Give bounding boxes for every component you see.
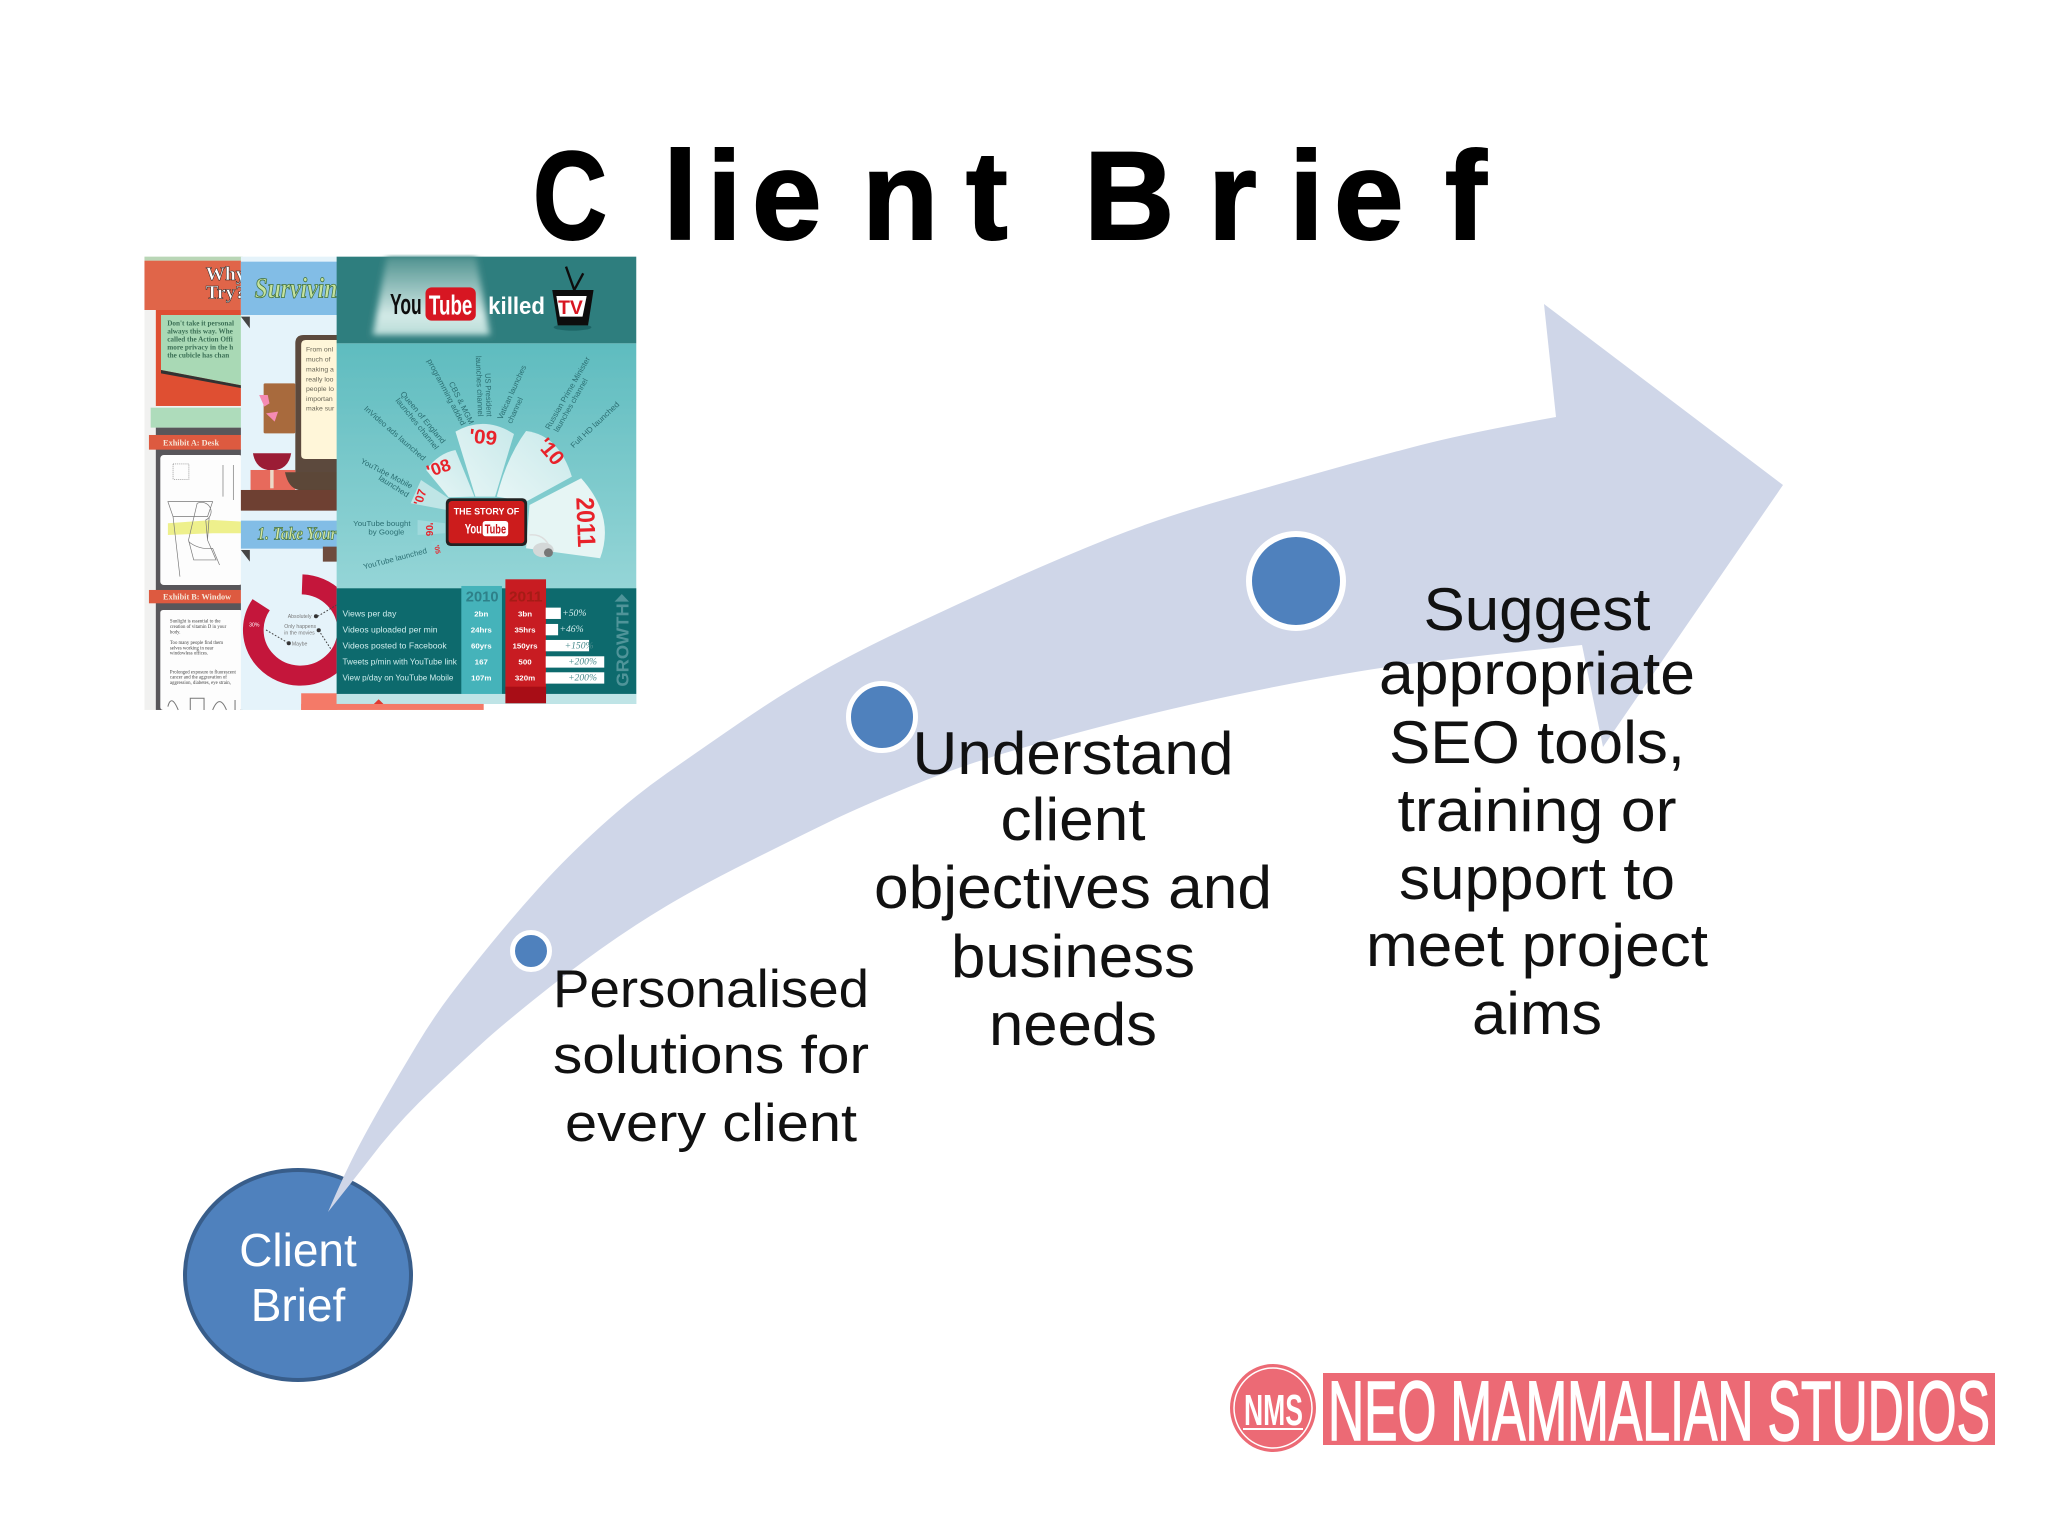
table: youtube growth: Videos uploaded per min (342, 625, 438, 635)
panel: why try infographic: Prolonged exposure to fluorescent (170, 670, 237, 675)
client brief circle: Brief (251, 1279, 346, 1331)
step 3 text (1366, 576, 1708, 1047)
table: youtube growth: View p/day on YouTube Mobile (342, 673, 454, 683)
table: youtube growth: +150% (565, 642, 594, 652)
chart: timeline fan: '09 (468, 426, 498, 450)
chart: timeline fan: Full HD launched (569, 400, 621, 450)
chart: timeline fan: '07 (411, 487, 430, 507)
chart: donut: in the movies (284, 631, 315, 637)
panel: why try infographic: aggression, diabetes, eye strain, (170, 681, 231, 686)
table: youtube growth: 107m (471, 674, 491, 683)
step 2 text: Understand (912, 720, 1234, 787)
badge: the story of youtube: Tube (485, 522, 506, 536)
chart: timeline fan: YouTube bought (353, 519, 411, 528)
logo: neo mammalian studios (1230, 1364, 1995, 1458)
chart: donut: Absolutely (288, 614, 312, 620)
icon: laptop: much of (306, 357, 331, 364)
chart: timeline fan: '06 (423, 523, 434, 536)
panel: why try infographic: more privacy in the h (167, 344, 233, 352)
chart: timeline fan: '10 (532, 434, 569, 470)
table: youtube growth: Views per day (342, 609, 397, 619)
icon: laptop: making a (306, 366, 334, 373)
table: youtube growth: 35hrs (514, 626, 536, 635)
badge: the story of youtube (446, 498, 554, 557)
title: C (533, 127, 607, 266)
step 3 text: aims (1472, 980, 1602, 1047)
panel: why try infographic: Exhibit A: Desk (163, 438, 220, 447)
icon: tv: TV (558, 297, 583, 319)
step 2 marker (848, 684, 916, 750)
table: youtube growth: Videos posted to Facebook (342, 641, 447, 651)
chart: timeline fan: InVideo ads launched (362, 404, 428, 463)
title: t (966, 127, 1008, 266)
table: youtube growth: 167 (475, 658, 488, 667)
client brief circle (185, 1170, 411, 1380)
panel: surviving infographic (241, 257, 349, 710)
panel: why try infographic: Don't take it personal (167, 320, 234, 328)
growth arrow (328, 304, 1783, 1212)
title: B (1084, 127, 1174, 266)
step 2 text: client (1000, 786, 1146, 853)
table: youtube growth: 2bn (474, 610, 489, 619)
table: youtube growth: +46% (559, 625, 584, 635)
step 3 text: support to (1399, 845, 1675, 912)
title: r (1208, 127, 1257, 266)
icon: laptop: make sur (306, 406, 335, 413)
step 2 text: objectives and (874, 854, 1272, 921)
table: youtube growth: 3bn (518, 610, 532, 619)
icon: laptop: From onl (306, 347, 334, 354)
step 1 marker (512, 932, 550, 970)
step 2 text: needs (989, 991, 1157, 1058)
panel: youtube killed tv infographic: You (390, 289, 422, 321)
chart: donut: Maybe (292, 641, 308, 647)
title: l (663, 127, 698, 266)
chart: timeline fan: programming added (425, 358, 468, 427)
table: youtube growth: 150yrs (512, 642, 538, 651)
panel: why try infographic: creation of vitamin D in your (170, 625, 227, 630)
step 3 text: meet project (1366, 912, 1708, 979)
badge: the story of youtube: THE STORY OF (454, 507, 520, 517)
step 3 text: SEO tools, (1389, 709, 1685, 776)
step 3 marker (1249, 534, 1343, 628)
panel: surviving infographic: 1. Take Your (257, 524, 337, 543)
panel: why try infographic: Why (206, 264, 246, 285)
panel: why try infographic: Exhibit B: Window (163, 592, 231, 601)
table: youtube growth: 2011 (509, 590, 543, 606)
panel: youtube killed tv infographic: Tube (429, 290, 472, 322)
step 1 text: every client (565, 1094, 857, 1153)
table: youtube growth: 2010 (466, 590, 499, 606)
step 2 text (874, 720, 1272, 1058)
chart: timeline fan: YouTube Mobile (359, 457, 414, 491)
icon: laptop: people lo (306, 386, 334, 393)
table: youtube growth: +200% (568, 674, 597, 684)
icon: laptop (295, 335, 337, 473)
logo badge (1230, 1364, 1316, 1452)
chart: timeline fan: US President (483, 373, 494, 417)
chart: timeline fan: CBS & MGM (447, 380, 476, 426)
chart: timeline fan: YouTube launched (362, 546, 428, 571)
step 2 text: business (951, 923, 1195, 990)
panel: why try infographic: Sunlight is essential to the (170, 620, 220, 625)
icon: tv (552, 267, 594, 331)
icon: laptop: really loo (306, 376, 334, 383)
infographic collage (144, 257, 636, 710)
table: youtube growth: 500 (518, 658, 532, 667)
panel: why try infographic: selves working in near (170, 646, 214, 651)
panel: youtube killed tv infographic (301, 257, 636, 710)
chart: timeline fan: Russian Prime Minister (543, 355, 592, 431)
title: e (752, 127, 822, 266)
chart: timeline fan: channel (505, 396, 525, 425)
icon: wine glass (251, 453, 295, 491)
step 3 text: Suggest (1424, 576, 1651, 643)
chart: timeline fan: '08 (424, 455, 454, 481)
step 3 text: appropriate (1379, 640, 1695, 707)
title: e (1334, 127, 1404, 266)
panel: why try infographic: called the Action Offi (167, 336, 233, 344)
badge: the story of youtube: You (465, 522, 482, 537)
chart: donut: 30% (249, 623, 260, 629)
chart: timeline fan: launches channel (552, 377, 590, 434)
table: youtube growth: GROWTH (612, 603, 632, 687)
chart: timeline fan: '05 (432, 544, 441, 555)
panel: why try infographic: body. (170, 630, 180, 635)
panel: why try infographic: Try? (206, 283, 245, 304)
step 1 text: solutions for (553, 1026, 869, 1085)
table: youtube growth: +50% (562, 609, 586, 619)
table: youtube growth: 24hrs (471, 626, 493, 635)
panel: why try infographic: always this way. Whe (167, 328, 233, 336)
panel: why try infographic: the cubicle has chan (167, 352, 229, 360)
title (533, 127, 1487, 266)
panel: why try infographic: Too many people find them (170, 641, 223, 646)
step 1 text (553, 960, 869, 1153)
panel: why try infographic: windowless offices. (170, 652, 208, 657)
step 1 text: Personalised (553, 960, 869, 1019)
panel: why try infographic (144, 257, 246, 710)
icon: laptop: importan (306, 396, 333, 403)
panel: youtube killed tv infographic: killed (488, 293, 545, 320)
client brief circle: Client (239, 1224, 357, 1276)
title: i (707, 127, 742, 266)
title: f (1445, 127, 1487, 266)
table: youtube growth: Tweets p/min with YouTube link (342, 657, 458, 667)
chart: donut: Only happens (284, 624, 317, 630)
logo badge: NMS (1244, 1386, 1303, 1435)
table: youtube growth: +200% (568, 658, 597, 668)
chart: timeline fan: 2011 (570, 497, 600, 548)
chart: timeline fan: Queen of England (398, 390, 447, 445)
chart: timeline fan: launches channel (394, 396, 441, 451)
title: i (1289, 127, 1324, 266)
chart: timeline fan: launched (377, 474, 411, 499)
panel: surviving infographic: Survivin (255, 273, 337, 304)
table: youtube growth: 60yrs (471, 642, 492, 651)
panel: why try infographic: cancer and the aggravation of (170, 676, 227, 681)
title: n (862, 127, 938, 266)
table: youtube growth (301, 579, 636, 710)
step 3 text: training or (1398, 777, 1676, 844)
chart: timeline fan: by Google (368, 528, 404, 537)
chart: timeline fan: Vatican launches (495, 364, 528, 421)
chart: donut (249, 573, 349, 677)
chart: timeline fan: launches channel (474, 356, 485, 417)
table: youtube growth: 320m (515, 674, 535, 683)
chart: timeline fan (353, 355, 621, 571)
